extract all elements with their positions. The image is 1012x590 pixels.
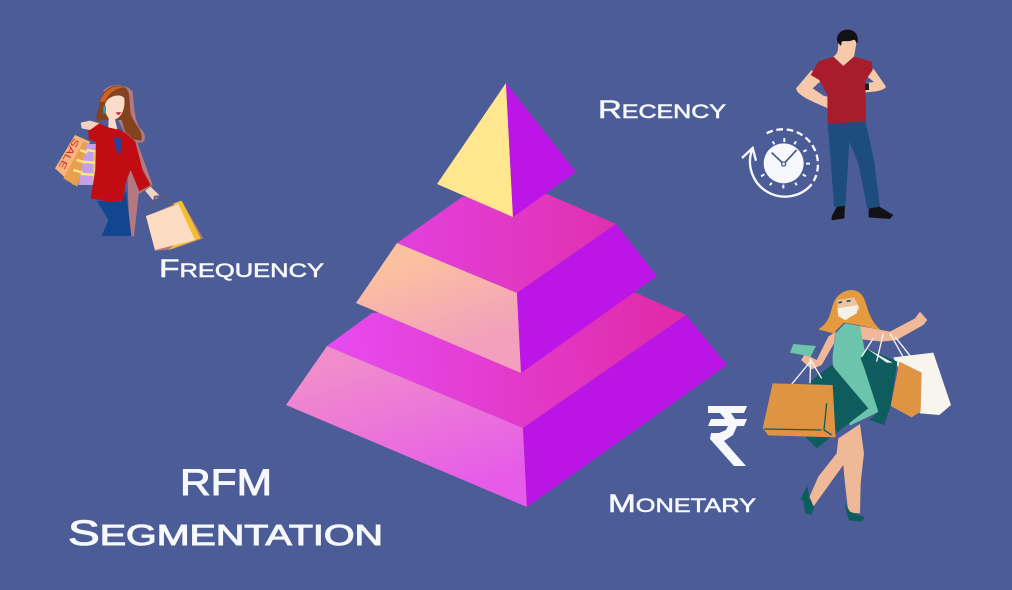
shoes xyxy=(800,486,865,522)
shadow outline xyxy=(103,85,203,251)
legs xyxy=(807,424,864,513)
right arm xyxy=(853,68,886,93)
icon: rupee symbol xyxy=(708,406,747,466)
shirt xyxy=(811,57,873,123)
pyramid tier: middle xyxy=(356,194,657,373)
neck and head xyxy=(833,40,857,66)
dress xyxy=(833,323,879,426)
left arm xyxy=(796,70,833,108)
hair xyxy=(818,290,881,333)
front dark bag xyxy=(861,348,897,425)
tick marks xyxy=(761,138,810,188)
pyramid tier: base xyxy=(286,293,727,507)
hands xyxy=(81,121,99,130)
pyramid xyxy=(286,83,727,507)
back dark bag xyxy=(806,365,868,448)
right bag xyxy=(146,196,201,250)
figure: man checking watch (recency) xyxy=(742,30,893,220)
watch xyxy=(865,83,869,90)
dashed ring xyxy=(767,129,818,184)
hair xyxy=(96,86,142,141)
clock face xyxy=(764,143,804,183)
jacket xyxy=(88,123,151,202)
figure: woman with shopping bags (frequency) xyxy=(55,85,203,251)
face and mask xyxy=(837,297,860,320)
label: Frequency: F REQUENCY xyxy=(159,255,324,283)
title: RFM xyxy=(180,462,272,503)
icon: clock with arrow xyxy=(742,129,818,197)
left bags: SALE xyxy=(57,137,81,171)
pyramid tier: apex xyxy=(437,83,576,217)
figure: woman with many bags (monetary) xyxy=(763,290,951,522)
bag handles xyxy=(788,333,920,388)
title: S EGMENTATION xyxy=(68,514,383,553)
phone / money xyxy=(790,344,816,357)
label: Monetary: M ONETARY xyxy=(608,490,756,518)
face and neck xyxy=(105,96,124,129)
label: Recency: R ECENCY xyxy=(598,96,726,124)
left arm xyxy=(801,332,836,369)
white bag xyxy=(893,353,951,415)
top xyxy=(114,137,122,155)
arrow xyxy=(750,150,812,197)
raised arm xyxy=(860,312,927,342)
title xyxy=(68,462,383,553)
small orange bag xyxy=(891,362,922,417)
pants xyxy=(97,190,131,236)
large orange bag xyxy=(763,383,836,437)
left bags xyxy=(55,135,103,187)
pants xyxy=(828,121,880,209)
shoes xyxy=(832,206,893,220)
